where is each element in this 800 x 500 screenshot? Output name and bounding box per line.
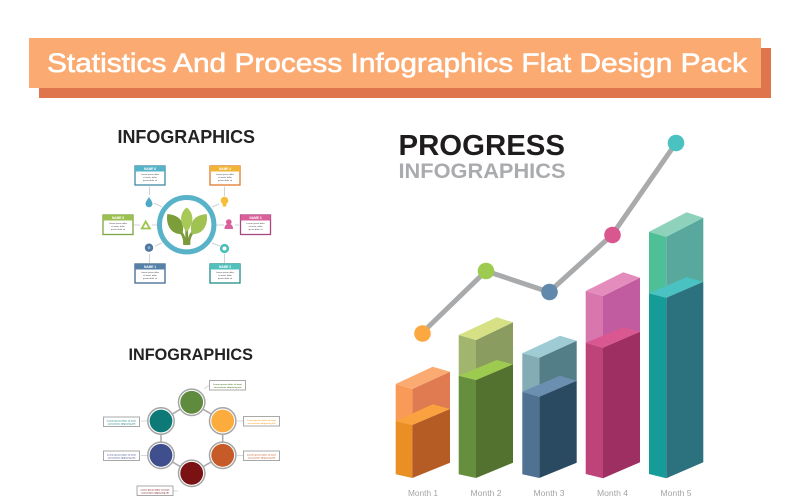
box: name 5 (103, 215, 133, 234)
callout: orange: consectetur adipiscing elit (248, 422, 276, 425)
heading: bottom infographics: INFOGRAPHICS (128, 346, 253, 364)
callout: burnt orange: Lorem ipsum dolor sit amet (247, 454, 276, 456)
axis labels (408, 489, 692, 498)
box: name 2: sit amet, dolor (218, 274, 232, 277)
icon: person (224, 219, 233, 229)
box: name 1: sit amet, dolor (143, 274, 157, 277)
callout: green (210, 380, 246, 390)
point: month 5 (668, 135, 684, 151)
callout: navy (104, 451, 140, 460)
node: green (178, 389, 205, 415)
heading: progress: PROGRESS (398, 130, 565, 162)
icon: gear (145, 244, 153, 252)
box: name 4: sit amet, dolor (218, 176, 232, 179)
subheading: infographics: INFOGRAPHICS (398, 159, 566, 183)
point: month 3 (541, 284, 558, 300)
box: name 6: sit amet, dolor (143, 176, 157, 179)
box: name 2 (210, 264, 240, 283)
callout: teal: consectetur adipiscing elit (108, 422, 136, 426)
callout: navy: consectetur adipiscing elit (108, 456, 136, 460)
node: dark red (178, 460, 205, 486)
point: month 2 (478, 263, 494, 279)
box: name 1: Lorem ipsum dolor (141, 271, 159, 274)
callout: dark red: consectetur adipiscing elit (141, 492, 169, 494)
bar: month 3 (522, 336, 577, 478)
callout: orange: Lorem ipsum dolor sit amet (247, 419, 276, 422)
box: name 6: Lorem ipsum dolor (141, 173, 159, 176)
callout leader lines (141, 386, 243, 491)
line chart (414, 135, 684, 342)
bar: month 5 (649, 212, 703, 478)
box: name 3 (240, 215, 270, 234)
box: name 6 (135, 166, 165, 185)
icon: hexagon nut (221, 245, 228, 252)
point: month 1 (414, 325, 431, 342)
box: name 1: ipsum dolor sit (143, 277, 157, 280)
bar: month 4 (586, 272, 640, 478)
node: burnt orange (210, 442, 236, 468)
callout: orange (244, 416, 280, 426)
box: name 6: ipsum dolor sit (143, 179, 157, 182)
node: orange (210, 408, 236, 434)
box: name 2: NAME 2 (219, 265, 231, 269)
box: name 6: NAME 6 (144, 167, 156, 171)
callout: teal: Lorem ipsum dolor sit amet (107, 420, 136, 422)
panel: top radial infographic (103, 126, 270, 283)
callout: navy: Lorem ipsum dolor sit amet (107, 454, 136, 456)
callout: burnt orange: consectetur adipiscing elit (248, 456, 276, 460)
box: name 3: NAME 3 (249, 216, 262, 220)
axis labels: Month 4 (597, 489, 629, 498)
box: name 2: ipsum dolor sit (218, 277, 232, 280)
box: name 4: Lorem ipsum dolor (216, 173, 234, 176)
callout: dark red (137, 486, 173, 496)
connector lines (134, 186, 239, 263)
icon: plant (167, 208, 207, 245)
connector ring (161, 402, 223, 473)
box: name 2: Lorem ipsum dolor (216, 271, 234, 274)
box: name 3: sit amet, dolor (249, 225, 263, 228)
title banner: Statistics And Process Infographics Flat Design Pack (47, 48, 748, 78)
callout: dark red: Lorem ipsum dolor sit amet (141, 488, 170, 492)
icon: recycle (142, 222, 150, 228)
panel: progress infographic (396, 130, 703, 498)
icon: water drop (146, 197, 152, 207)
box: name 4: ipsum dolor sit (218, 179, 232, 182)
axis labels: Month 1 (408, 489, 439, 498)
axis labels: Month 5 (660, 489, 692, 498)
bar: month 2 (459, 317, 513, 478)
callout: green: consectetur adipiscing elit (214, 386, 242, 389)
panel: bottom cycle infographic (104, 346, 280, 496)
box: name 5: sit amet, dolor (111, 225, 125, 228)
axis labels: Month 3 (534, 489, 565, 498)
axis labels: Month 2 (470, 489, 502, 498)
title banner (29, 38, 771, 98)
heading: top infographics: INFOGRAPHICS (118, 126, 255, 147)
icon: light bulb (221, 197, 228, 206)
central ring with plant (160, 198, 214, 252)
box: name 3: Lorem ipsum dolor (246, 222, 265, 225)
box: name 4: NAME 4 (219, 167, 231, 171)
box: name 3: ipsum dolor sit (248, 228, 263, 231)
box: name 1 (135, 264, 165, 283)
box: name 5: Lorem ipsum dolor (109, 222, 127, 225)
box: name 4 (210, 166, 240, 185)
point: month 4 (604, 227, 621, 243)
callout: green: Lorem ipsum dolor sit amet (213, 383, 242, 386)
node: navy (148, 442, 174, 468)
box: name 5: ipsum dolor sit (111, 228, 125, 231)
callout: burnt orange (244, 451, 280, 460)
bar: month 1 (396, 367, 450, 478)
node: teal (148, 408, 174, 434)
callout: teal (104, 417, 140, 426)
box: name 1: NAME 1 (144, 265, 156, 269)
box: name 5: NAME 5 (112, 216, 124, 220)
